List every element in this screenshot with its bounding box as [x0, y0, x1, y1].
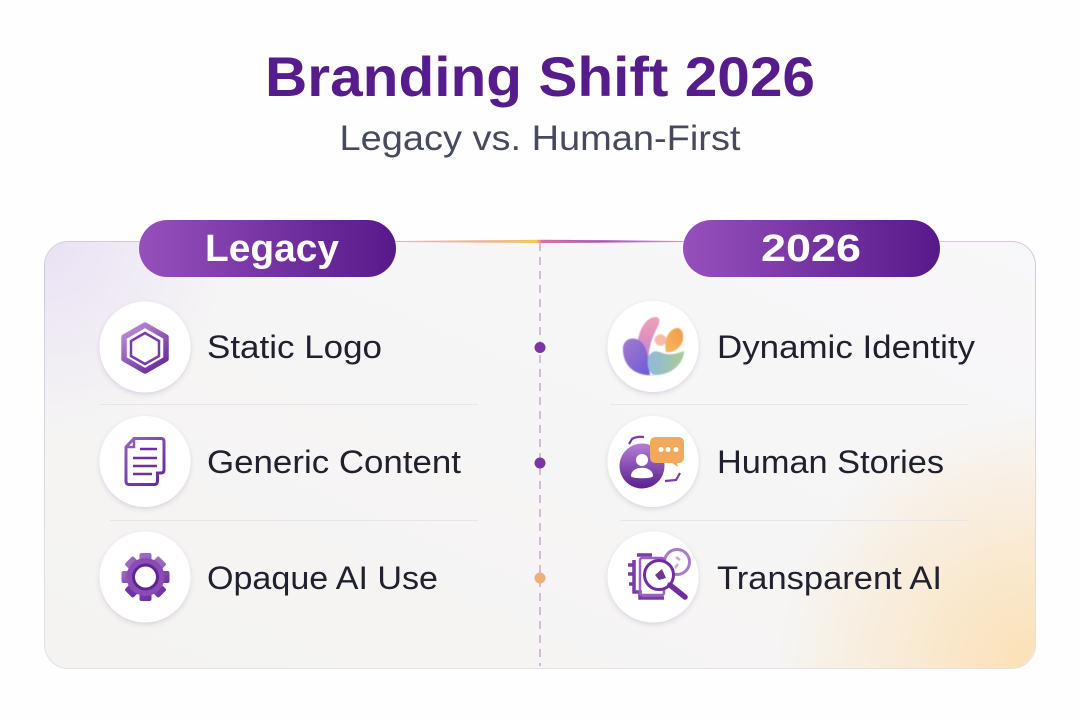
- row: transparent ai: [608, 532, 942, 622]
- panel: comparison card: [44, 240, 1036, 669]
- timeline dot 2: [534, 458, 546, 468]
- row: dynamic identity: [608, 301, 975, 392]
- icon: document: [126, 438, 164, 484]
- legacy header pill: Legacy: [205, 228, 339, 270]
- row: static logo: [100, 302, 382, 392]
- icon: gear: [122, 553, 170, 601]
- row: opaque ai use: [100, 532, 438, 622]
- 2026 header pill: [683, 220, 940, 277]
- timeline dot 1: [534, 342, 546, 353]
- legacy header pill: [139, 220, 396, 277]
- icon: colourful petals: [623, 317, 684, 375]
- icon: person with speech bubble: [620, 437, 684, 488]
- label: Opaque AI Use: [207, 560, 438, 596]
- row: generic content: [100, 416, 461, 507]
- label: Static Logo: [207, 329, 382, 365]
- timeline dot 3: [534, 572, 546, 584]
- label: Transparent AI: [717, 560, 942, 596]
- label: Dynamic Identity: [717, 329, 975, 365]
- icon: chip and magnifier: [628, 550, 690, 598]
- 2026 header pill: 2026: [761, 228, 861, 270]
- row: human stories: [608, 416, 944, 507]
- subtitle: Legacy vs. Human-First: [340, 119, 741, 158]
- label: Human Stories: [717, 444, 944, 480]
- icon: hexagon: [124, 325, 166, 371]
- label: Generic Content: [207, 444, 461, 480]
- title: Branding Shift 2026: [265, 45, 815, 108]
